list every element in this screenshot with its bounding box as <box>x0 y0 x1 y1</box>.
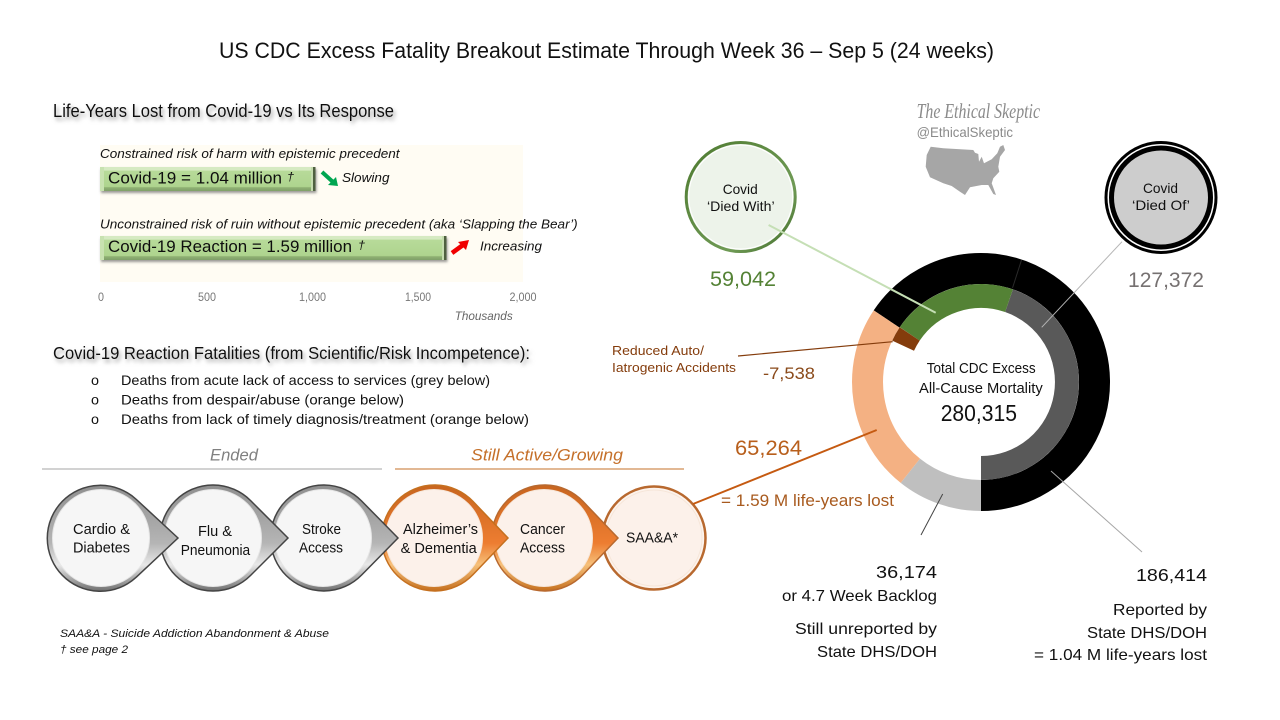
label: reduced accidents: Iatrogenic Accidents <box>612 360 737 375</box>
label: unreported: 36,174 <box>876 562 937 582</box>
axis labels <box>98 292 536 304</box>
watermark: the ethical skeptic <box>917 99 1041 140</box>
bullet list <box>91 372 529 427</box>
donut center text: All-Cause Mortality <box>919 381 1043 397</box>
inner ring: died of <box>981 301 1067 468</box>
label: reported: = 1.04 M life-years lost <box>1034 647 1208 664</box>
bar: Covid-19 reaction: Covid-19 Reaction = 1.59 million <box>108 238 352 256</box>
bar chart: life-years lost <box>98 145 578 323</box>
bullet list: Deaths from acute lack of access to services (grey below) <box>121 372 490 388</box>
step: SAA&A: SAA&A* <box>626 531 678 547</box>
label: unreported: or 4.7 Week Backlog <box>782 588 937 605</box>
step: flu and pneumonia: Flu & <box>198 524 232 540</box>
heading: life-years lost: Life-Years Lost from Covid-19 vs Its Response <box>53 101 394 121</box>
arrow head: slowing <box>328 177 338 186</box>
label: reduced accidents: Reduced Auto/ <box>612 343 704 358</box>
bullet list: o <box>91 392 99 408</box>
value: died of: 127,372 <box>1128 269 1204 292</box>
label: reported: State DHS/DOH <box>1087 625 1207 642</box>
label: unreported: Still unreported by <box>795 621 937 638</box>
callout: died of <box>1106 142 1216 252</box>
step: cancer access: Cancer <box>520 522 565 538</box>
outer ring: reported <box>887 268 1095 496</box>
title: US CDC Excess Fatality Breakout Estimate Through Week 36 – Sep 5 (24 weeks) <box>219 38 994 63</box>
chart background <box>100 145 523 282</box>
bar: Covid-19: Covid-19 = 1.04 million <box>108 170 282 188</box>
value: reaction deaths: 65,264 <box>735 437 802 460</box>
axis labels: 0 <box>98 292 104 304</box>
axis labels: 2,000 <box>510 292 536 304</box>
step: SAA&A <box>602 486 706 590</box>
label: unreported <box>782 562 937 661</box>
axis labels: 500 <box>198 292 216 304</box>
step: alzheimer's: Alzheimer’s <box>403 522 478 538</box>
step: cardio and diabetes <box>47 485 178 591</box>
callout: died of: Covid <box>1143 180 1178 196</box>
watermark: the ethical skeptic: The Ethical Skeptic <box>917 99 1041 123</box>
outer ring: reaction <box>868 319 910 471</box>
label: reported: 186,414 <box>1136 565 1207 585</box>
outer ring: unreported <box>910 471 981 496</box>
callout: died with <box>686 142 795 252</box>
bullet list: Deaths from lack of timely diagnosis/treatment (orange below) <box>121 411 529 427</box>
step: stroke access: Stroke <box>302 522 341 538</box>
donut center text: Total CDC Excess <box>927 361 1036 377</box>
step: flu and pneumonia: Pneumonia <box>181 543 251 559</box>
donut chart <box>868 260 1095 496</box>
axis labels: 1,500 <box>405 292 431 304</box>
leader lines <box>693 225 1142 552</box>
label: ended: Ended <box>210 446 259 464</box>
label: slowing: Slowing <box>342 170 390 185</box>
step: cardio and diabetes: Cardio & <box>73 522 130 538</box>
label: reaction life-years: = 1.59 M life-years lost <box>721 492 894 510</box>
process chain <box>47 485 706 591</box>
step: stroke access: Access <box>299 541 343 557</box>
callout: died with: ‘Died With’ <box>707 198 775 214</box>
step: cancer access: Access <box>520 541 565 557</box>
label: reported <box>1034 565 1208 664</box>
step: flu and pneumonia <box>160 485 288 591</box>
bar: Covid-19 reaction <box>100 236 446 260</box>
step: alzheimer's: & Dementia <box>401 541 478 557</box>
heading: reaction fatalities: Covid-19 Reaction Fatalities (from Scientific/Risk Incompetence): <box>53 343 530 363</box>
arrow: increasing <box>452 245 463 253</box>
inner ring: died with <box>910 296 1009 334</box>
bullet list: o <box>91 372 99 388</box>
arrow: slowing <box>322 172 333 182</box>
bullet list: Deaths from despair/abuse (orange below) <box>121 392 404 408</box>
donut center text <box>919 361 1043 426</box>
label: increasing: Increasing <box>480 239 543 254</box>
footnotes <box>60 628 329 656</box>
bar: Covid-19 reaction: † <box>358 238 365 252</box>
caption: constrained risk: Constrained risk of harm with epistemic precedent <box>100 146 401 161</box>
label: reported: Reported by <box>1113 602 1207 619</box>
bullet list: o <box>91 411 99 427</box>
value: reduced accidents: -7,538 <box>763 365 815 383</box>
step: cardio and diabetes: Diabetes <box>73 541 130 557</box>
label: still active: Still Active/Growing <box>471 446 624 464</box>
step: cancer access <box>492 485 618 591</box>
footnotes: SAA&A - Suicide Addiction Abandonment & Abuse <box>60 628 329 640</box>
icon: US map <box>926 145 1005 195</box>
donut center text: 280,315 <box>941 400 1017 426</box>
callout: died of: ‘Died Of’ <box>1132 197 1190 213</box>
step: stroke access <box>271 485 398 591</box>
footnotes: † see page 2 <box>60 644 128 656</box>
inner ring: reduced accidents <box>903 334 910 346</box>
bar: Covid-19 <box>100 167 316 191</box>
bar: Covid-19: † <box>287 170 294 184</box>
axis labels: 1,000 <box>299 292 326 304</box>
value: died with: 59,042 <box>710 268 776 291</box>
step: alzheimer's <box>382 485 508 591</box>
axis unit: Thousands <box>455 309 513 323</box>
label: reduced accidents <box>612 343 737 375</box>
watermark: the ethical skeptic: @EthicalSkeptic <box>917 124 1013 140</box>
callout: died with: Covid <box>723 181 758 197</box>
caption: unconstrained risk: Unconstrained risk of ruin without epistemic precedent (aka ‘Slapping the Bear’) <box>100 217 578 232</box>
arrow head: increasing <box>458 240 469 250</box>
label: unreported: State DHS/DOH <box>817 644 937 661</box>
